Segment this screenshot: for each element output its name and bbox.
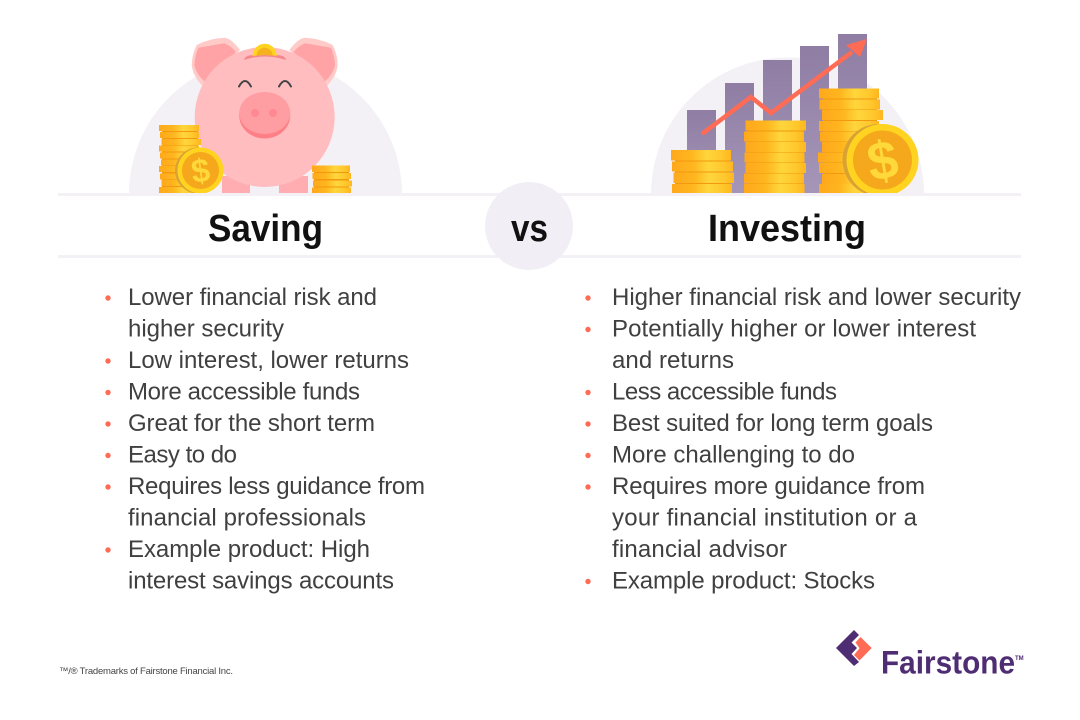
pig legs [222,176,308,193]
coin stack 2 [744,120,806,193]
heading: Saving: Saving [208,208,323,250]
list: saving points: Great for the short term [128,410,375,437]
wordmark: Fairstone [881,644,1015,680]
list: investing points: Requires more guidance from [612,473,925,500]
vs badge: vs [511,208,548,250]
list: investing points: Higher financial risk and lower security [612,284,1021,311]
coin stack 3 [818,88,883,193]
large dollar coin [842,124,918,196]
list: saving points: Requires less guidance from [128,473,425,500]
footnote: ™/® Trademarks of Fairstone Financial Inc. [59,666,233,677]
coin stack left of pig [159,125,201,193]
left ear [192,38,240,90]
dollar coin: $ [189,151,212,190]
list: saving points [105,284,425,594]
coin slot [244,55,286,60]
logo: Fairstone [836,630,1024,680]
backdrop: saving semicircle [129,58,402,194]
list: saving points: interest savings accounts [128,568,394,594]
list: investing points: Best suited for long term goals [612,410,933,437]
backdrop: investing semicircle [651,58,924,194]
list: investing points: and returns [612,347,734,374]
coin stack 1 [671,150,734,193]
list: saving points: financial professionals [128,504,366,532]
list: saving points: Lower financial risk and [128,284,377,311]
pig eyes [239,81,291,86]
large dollar coin: $ [863,129,903,193]
list: saving points: higher security [128,316,284,342]
heading: Investing: Investing [708,208,866,250]
purple bars [687,34,867,193]
list: investing points: Example product: Stocks [612,568,875,594]
pig snout [239,92,290,138]
coin entering slot [252,44,277,56]
trademark: TM [1015,656,1024,662]
rising arrow [702,39,867,134]
logo mark [836,630,872,666]
list: investing points [585,284,1021,594]
list: saving points: Easy to do [128,442,237,468]
list: investing points: More challenging to do [612,442,855,468]
list: investing points: Less accessible funds [612,378,837,406]
icon: growth chart with coins [671,34,918,196]
list: saving points: Example product: High [128,536,370,563]
pig body [195,47,335,187]
dollar coin [175,148,224,194]
header band rules [58,193,1021,258]
vs badge [485,182,573,270]
coin stack right of pig [312,166,352,193]
list: saving points: More accessible funds [128,378,360,406]
list: investing points: your financial institution or a [612,504,918,532]
list: investing points: Potentially higher or lower interest [612,316,976,342]
right ear [289,38,338,90]
icon: piggy bank [159,38,352,194]
list: saving points: Low interest, lower returns [128,347,409,374]
list: investing points: financial advisor [612,536,787,563]
